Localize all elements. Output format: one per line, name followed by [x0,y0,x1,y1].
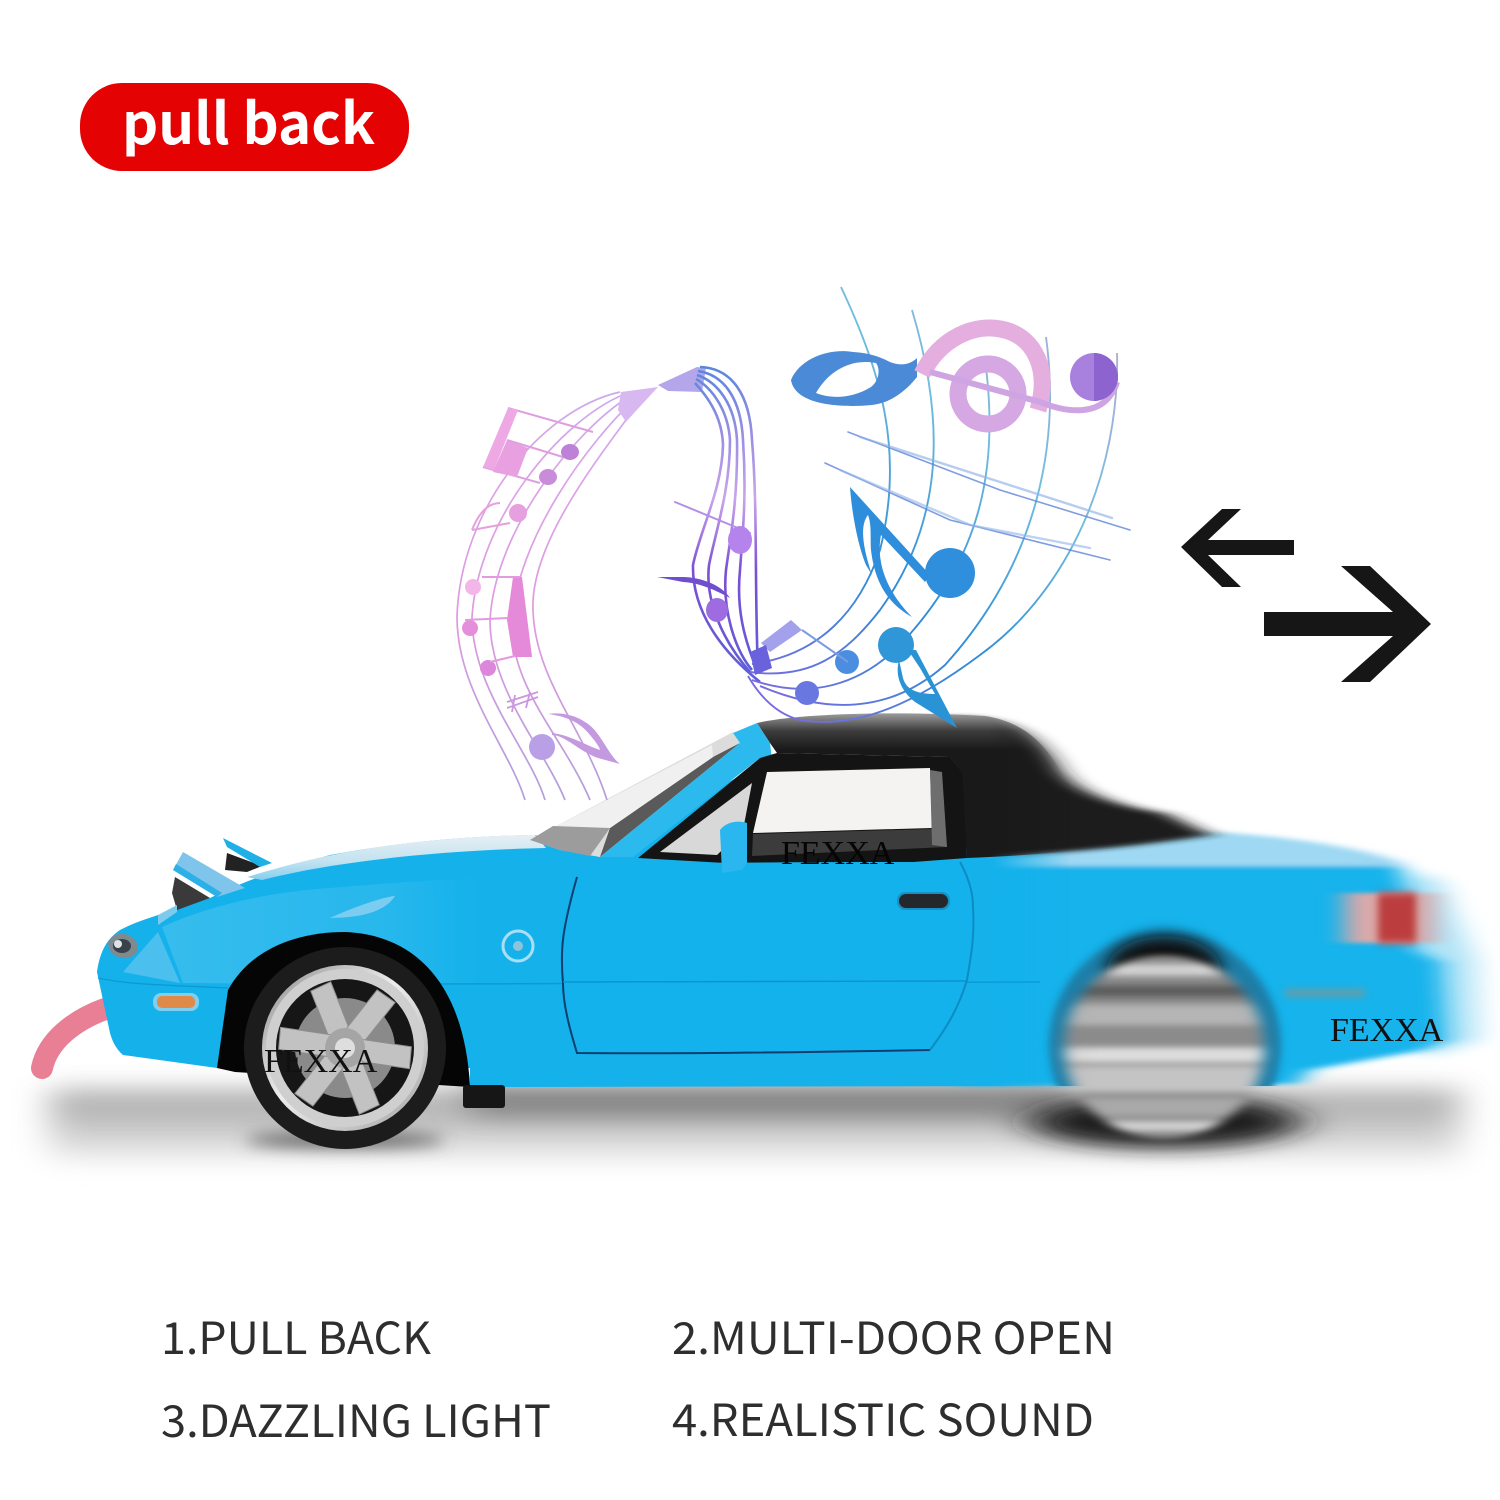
spokes [278,982,412,1114]
A pillar [600,723,772,857]
windshield pale area [530,732,740,857]
pink staff [457,392,642,800]
open hood flaps [158,838,272,925]
body crease [98,978,1040,988]
watermark: front wheel: FEXXA [264,1043,378,1080]
badge: pull back: pull back [122,79,376,161]
arrow: right [1264,566,1431,682]
pink tail pipe [42,1009,105,1068]
pink notes [462,408,620,764]
car [97,713,1478,1159]
mirror [720,822,747,873]
clef [791,328,1118,424]
windshield base [530,826,610,856]
door [562,862,973,1053]
front wheel arch [217,932,470,1087]
rear halo [1400,870,1478,1056]
ground shadow [50,1088,1460,1160]
ribbon bands [618,387,658,422]
watermark: window: FEXXA [781,835,895,872]
quarter glass [660,783,752,855]
fuel cap [503,931,533,961]
fender reflection [330,896,395,918]
feature 1: 1.PULL BACK [161,1303,432,1367]
music notes illustration [457,287,1130,800]
black jack [463,1085,505,1108]
side glass [753,768,932,833]
hood highlight [247,835,546,880]
middle staff [693,367,760,682]
feature 2: 2.MULTI-DOOR OPEN [672,1303,1115,1367]
door outline [562,877,930,1053]
headlight [105,931,141,961]
windshield glass [553,745,713,828]
windshield frame [600,743,740,857]
blue staff [748,287,1117,722]
door crease [563,981,968,982]
rear wheel blurred [1054,951,1275,1142]
tail light [1345,893,1435,943]
rear body blurred [950,832,1446,1086]
rear marker [1285,990,1365,996]
rear glass edge [930,770,947,847]
streak lines [675,432,1130,560]
large blue notes [750,487,975,728]
window lower interior [752,829,947,856]
door handle [897,892,950,910]
side marker light [153,993,199,1011]
feature list [161,1303,1115,1450]
front body and roof [97,713,1066,1087]
arrow: left [1181,509,1294,587]
badge: pull back [80,79,409,171]
window surround [638,753,967,863]
roof blurred rear [950,716,1212,858]
nose panel [123,932,180,983]
fender panel [162,878,480,985]
watermark: rear: FEXXA [1330,1012,1444,1049]
rear wheel arch [1044,923,1286,1086]
feature 4: 4.REALISTIC SOUND [672,1385,1094,1449]
front wheel [244,947,446,1149]
purple notes [657,526,752,622]
feature 3: 3.DAZZLING LIGHT [161,1386,551,1450]
